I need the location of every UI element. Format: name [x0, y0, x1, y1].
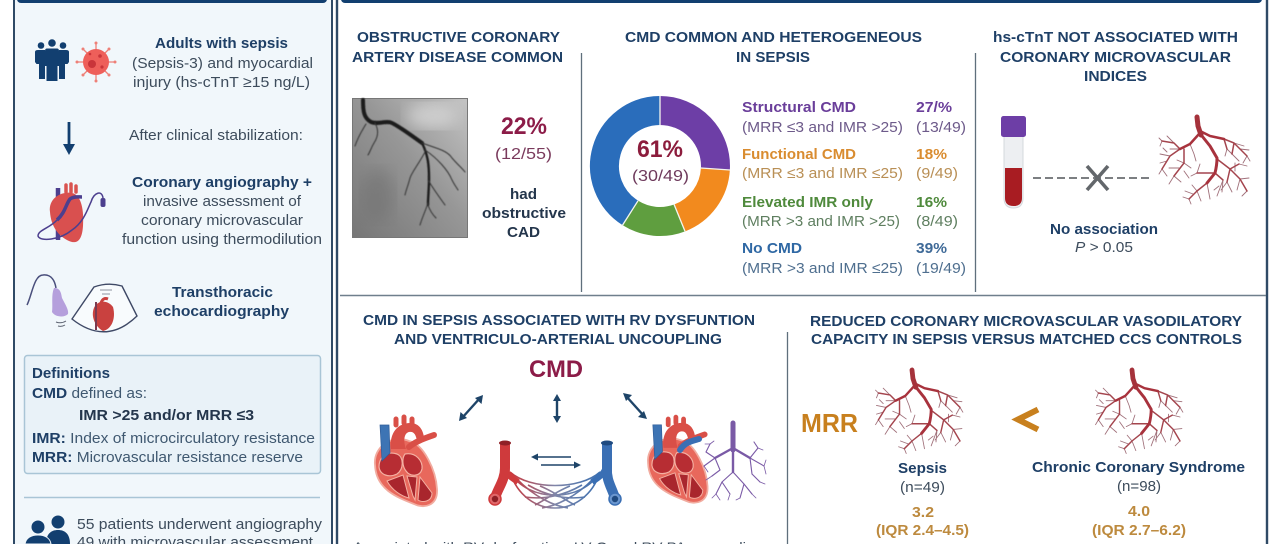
text: angiography: invasive assessment of	[143, 193, 302, 210]
text: population	[132, 35, 313, 91]
column: sepsis	[876, 460, 969, 539]
column: chronic coronary syndrome: (IQR 2.7–6.2)	[1092, 522, 1186, 539]
text: echocardiography: echocardiography	[154, 303, 290, 320]
definitions box: CMD defined as:	[32, 385, 147, 402]
column: sepsis: Sepsis	[898, 460, 947, 477]
statistic: 22 percent: obstructive	[482, 205, 566, 222]
icon: patient count	[25, 516, 70, 544]
legend: elevated IMR: 16%	[916, 194, 947, 211]
panel: RV dysfunction	[353, 312, 766, 544]
icon: microvascular tree	[1159, 117, 1250, 204]
statistic: 22 percent: CAD	[507, 224, 540, 241]
donut chart: (30/49)	[632, 168, 689, 185]
text: echocardiography	[154, 284, 290, 320]
statistic: 22 percent: 22%	[501, 113, 547, 140]
statistic: 22 percent	[482, 113, 566, 241]
heading: CMD common	[625, 29, 922, 66]
legend: structural CMD: 27/%	[916, 99, 952, 116]
heading: hs-cTnT: INDICES	[1084, 68, 1147, 85]
column: chronic coronary syndrome: 4.0	[1128, 503, 1150, 520]
panel: hs-cTnT	[993, 29, 1250, 256]
legend: elevated IMR: (8/49)	[916, 213, 958, 230]
icon: sepsis tree	[876, 370, 963, 453]
arrow: down	[63, 122, 75, 155]
heading: reduced MRR	[810, 313, 1242, 348]
left panel: study design	[14, 0, 332, 544]
icon: patients	[35, 39, 69, 81]
legend: structural CMD	[742, 99, 966, 136]
heading: reduced MRR: CAPACITY IN SEPSIS VERSUS MATCHED CCS CONTROLS	[811, 331, 1242, 348]
text: no association: No association	[1050, 221, 1158, 238]
text: population: injury (hs-cTnT ≥15 ng/L)	[133, 74, 310, 91]
text: patient count: 55 patients underwent angiography	[77, 516, 323, 533]
legend: functional CMD: Functional CMD	[742, 146, 856, 163]
legend: elevated IMR: Elevated IMR only	[742, 194, 874, 211]
heading: CMD common: IN SEPSIS	[736, 49, 810, 66]
icon: less than	[1018, 410, 1038, 430]
icon: blood tube	[1001, 116, 1026, 208]
column: sepsis: 3.2	[912, 504, 934, 521]
panel: CMD prevalence	[604, 29, 966, 277]
column: sepsis: (n=49)	[900, 479, 945, 496]
definitions box: Definitions	[32, 365, 110, 382]
legend: functional CMD: (9/49)	[916, 165, 958, 182]
heading: obstructive CAD	[352, 29, 563, 66]
no association link	[1033, 166, 1152, 190]
legend: functional CMD: 18%	[916, 146, 947, 163]
statistic: 22 percent: (12/55)	[495, 146, 552, 163]
legend: functional CMD	[742, 146, 958, 182]
text: angiography: Coronary angiography +	[132, 174, 312, 191]
heading: obstructive CAD: OBSTRUCTIVE CORONARY	[357, 29, 560, 46]
heading: RV dysfunction: AND VENTRICULO-ARTERIAL UNCOUPLING	[394, 331, 722, 348]
legend: structural CMD: (MRR ≤3 and IMR >25)	[742, 119, 903, 136]
column: chronic coronary syndrome: Chronic Coronary Syndrome	[1032, 459, 1245, 476]
definitions box	[24, 356, 320, 474]
legend: functional CMD: (MRR ≤3 and IMR ≤25)	[742, 165, 903, 182]
donut chart: 61%	[637, 136, 683, 163]
results panel frame	[337, 0, 1267, 544]
heading: hs-cTnT: CORONARY MICROVASCULAR	[1000, 49, 1231, 66]
arrows: CMD links	[459, 393, 647, 423]
icon: heart with catheter	[38, 184, 106, 242]
legend: no CMD: (19/49)	[916, 260, 966, 277]
legend: structural CMD: (13/49)	[916, 119, 966, 136]
heading: CMD common: CMD COMMON AND HETEROGENEOUS	[625, 29, 922, 46]
legend: no CMD: 39%	[916, 240, 947, 257]
heading: obstructive CAD: ARTERY DISEASE COMMON	[352, 49, 563, 66]
icon: virus	[76, 42, 116, 82]
heading: hs-cTnT	[993, 29, 1238, 85]
legend: no CMD: No CMD	[742, 240, 802, 257]
text: stabilization: After clinical stabilization:	[129, 127, 303, 144]
definitions box: MRR: Microvascular resistance reserve	[32, 449, 303, 466]
panel: reduced MRR	[801, 313, 1245, 539]
donut chart	[604, 96, 730, 231]
text: angiography	[122, 174, 322, 248]
legend: elevated IMR: (MRR >3 and IMR >25)	[742, 213, 900, 230]
legend: no CMD	[742, 240, 966, 277]
label: CMD: CMD	[529, 356, 583, 383]
text: patient count	[77, 516, 323, 544]
icon: echo probe and sector	[27, 275, 137, 332]
heading: RV dysfunction	[363, 312, 755, 348]
statistic: 22 percent: had	[510, 186, 537, 203]
heading: reduced MRR: REDUCED CORONARY MICROVASCULAR VASODILATORY	[810, 313, 1242, 330]
legend: elevated IMR	[742, 194, 958, 230]
heading: RV dysfunction: CMD IN SEPSIS ASSOCIATED WITH RV DYSFUNTION	[363, 312, 755, 329]
definitions box: IMR >25 and/or MRR ≤3	[79, 407, 254, 424]
text: echocardiography: Transthoracic	[172, 284, 273, 301]
column: sepsis: (IQR 2.4–4.5)	[876, 522, 969, 539]
image: coronary angiogram	[352, 98, 468, 238]
icon: heart	[375, 417, 437, 506]
icon: CCS tree	[1096, 370, 1183, 453]
panel: obstructive CAD	[352, 29, 566, 241]
column: chronic coronary syndrome	[1032, 459, 1245, 539]
icon: arteriole to venule network	[489, 440, 621, 508]
legend: no CMD: (MRR >3 and IMR ≤25)	[742, 260, 903, 277]
heading: hs-cTnT: hs-cTnT NOT ASSOCIATED WITH	[993, 29, 1238, 46]
text: population: Adults with sepsis	[155, 35, 288, 52]
column: chronic coronary syndrome: (n=98)	[1117, 478, 1161, 495]
text: angiography: function using thermodilution	[122, 231, 322, 248]
label: MRR: MRR	[801, 408, 858, 438]
icon: right heart and lung vessels	[648, 417, 766, 503]
legend: structural CMD: Structural CMD	[742, 99, 856, 116]
text: no association: P > 0.05	[1075, 239, 1133, 256]
definitions box: IMR: Index of microcirculatory resistance	[32, 430, 315, 447]
text: angiography: coronary microvascular	[141, 212, 303, 229]
text: no association	[1050, 221, 1158, 256]
text: population: (Sepsis-3) and myocardial	[132, 55, 313, 72]
